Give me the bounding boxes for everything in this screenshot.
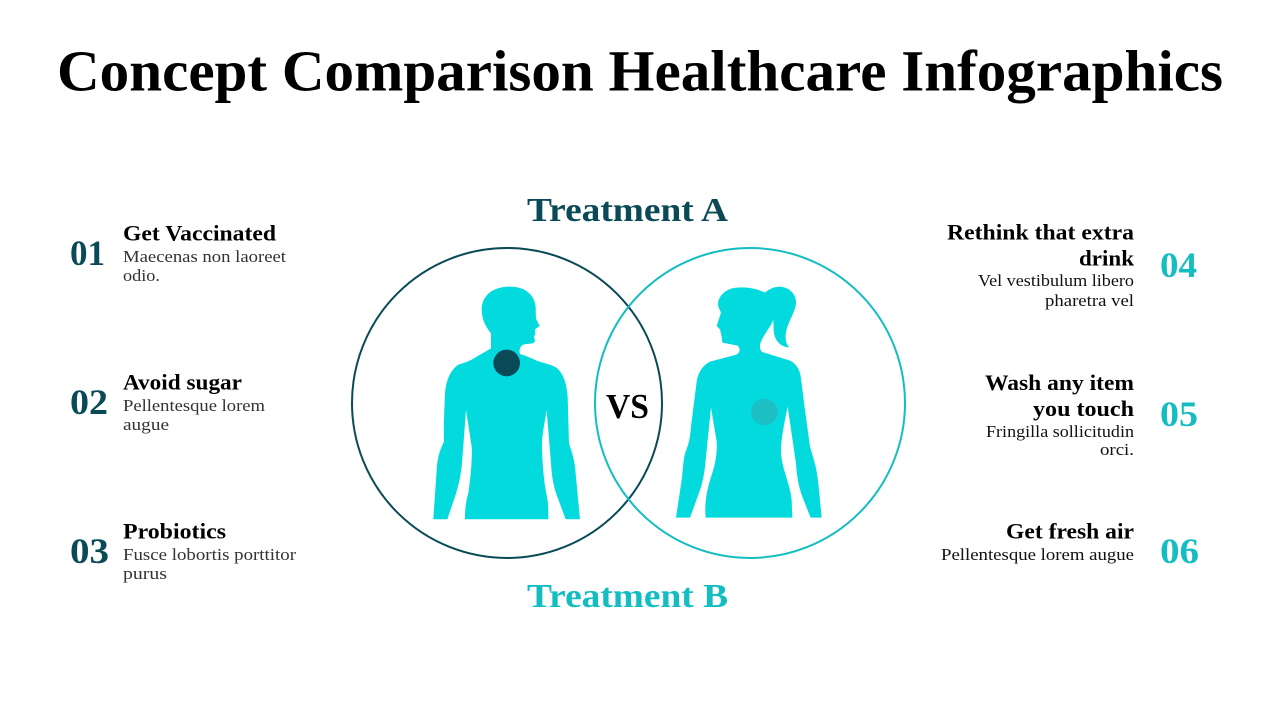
- item 01: [70, 220, 286, 285]
- venn circle: treatment B: [595, 248, 905, 558]
- item 06: [941, 518, 1199, 571]
- item 01: 01: [70, 233, 105, 273]
- item 02: augue: [123, 415, 169, 434]
- heading: Treatment A: Treatment A: [527, 192, 728, 229]
- item 01: Get Vaccinated: [123, 220, 276, 246]
- marker: neck dot: [493, 350, 520, 376]
- item 04: Vel vestibulum libero: [978, 271, 1134, 290]
- title: Concept Comparison Healthcare Infographics: [57, 38, 1223, 104]
- item 02: 02: [70, 382, 108, 422]
- item 04: drink: [1079, 246, 1135, 270]
- item 03: [70, 518, 296, 583]
- item 05: [985, 370, 1198, 459]
- item 03: purus: [123, 564, 167, 583]
- item 01: Maecenas non laoreet: [123, 247, 286, 266]
- item 05: you touch: [1033, 396, 1134, 421]
- icon: female silhouette: [676, 287, 822, 518]
- item 04: pharetra vel: [1045, 291, 1134, 310]
- item 05: Fringilla sollicitudin: [986, 422, 1135, 441]
- item 02: [70, 370, 265, 434]
- item 05: 05: [1160, 394, 1198, 434]
- marker: chest dot: [751, 399, 778, 425]
- item 06: Pellentesque lorem augue: [941, 545, 1134, 564]
- item 04: Rethink that extra: [947, 220, 1134, 244]
- item 03: Fusce lobortis porttitor: [123, 545, 296, 564]
- label: VS: VS: [606, 387, 649, 426]
- item 03: Probiotics: [123, 518, 226, 544]
- item 05: orci.: [1100, 440, 1134, 459]
- item 06: 06: [1160, 531, 1199, 571]
- icon: male silhouette: [433, 287, 580, 519]
- item 06: Get fresh air: [1006, 518, 1134, 544]
- item 02: Pellentesque lorem: [123, 396, 265, 415]
- item 01: odio.: [123, 266, 160, 285]
- heading: Treatment B: Treatment B: [527, 578, 728, 615]
- item 02: Avoid sugar: [123, 370, 242, 394]
- item 04: [947, 220, 1197, 310]
- venn circle: treatment A: [352, 248, 662, 558]
- item 04: 04: [1160, 245, 1197, 285]
- item 05: Wash any item: [985, 370, 1134, 395]
- item 03: 03: [70, 531, 109, 571]
